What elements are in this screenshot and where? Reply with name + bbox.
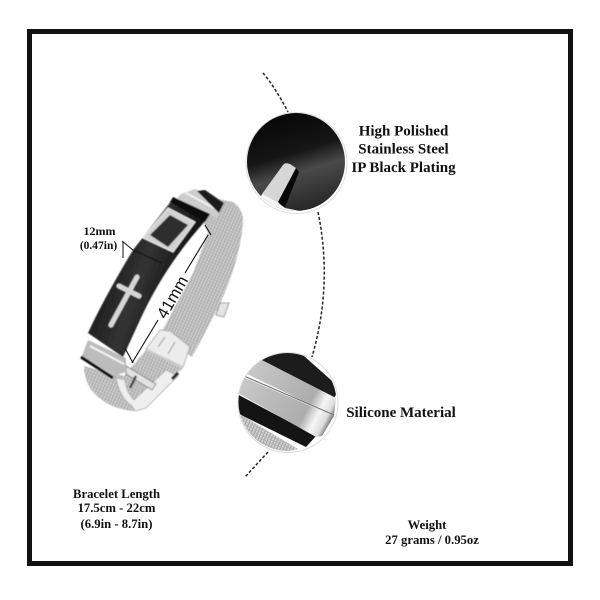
clasp tab — [216, 303, 229, 317]
text: polished steel: High Polished — [359, 124, 449, 140]
text: weight — [385, 518, 479, 547]
bottom steel cap — [82, 340, 126, 376]
text: polished steel: Stainless Steel — [358, 142, 449, 158]
top black band — [170, 197, 210, 222]
frame border — [30, 32, 570, 564]
leather inset — [150, 215, 188, 247]
label: 12mm: 12mm — [84, 224, 116, 238]
length dimension line — [125, 225, 211, 363]
buckle dark edge — [172, 373, 178, 379]
width dimension line — [122, 241, 133, 258]
text: bracelet length: 17.5cm - 22cm — [78, 501, 156, 515]
top steel cap — [176, 189, 224, 218]
detail circle: silicone — [238, 352, 338, 453]
buckle pin — [126, 366, 156, 390]
cross icon — [111, 277, 139, 325]
text: bracelet length: Bracelet Length — [73, 487, 160, 501]
text: bracelet length: (6.9in - 8.7in) — [81, 517, 152, 531]
label: 12mm: (0.47in) — [80, 240, 117, 252]
text: polished steel — [351, 124, 456, 176]
bracelet photo — [81, 189, 243, 411]
text: silicone: Silicone Material — [346, 405, 456, 421]
text: weight: 27 grams / 0.95oz — [385, 533, 479, 547]
plate frame — [143, 208, 195, 252]
mesh strap — [160, 193, 243, 357]
black plate — [88, 200, 207, 357]
lower mesh strap — [84, 350, 183, 411]
inner clasp loop — [116, 370, 178, 411]
dashed connector arc — [245, 73, 324, 477]
label: 12mm — [80, 224, 117, 252]
text: bracelet length — [73, 487, 160, 531]
plate seam — [133, 250, 162, 263]
clasp plates — [146, 330, 190, 367]
top right black band — [197, 190, 224, 213]
text: polished steel: IP Black Plating — [351, 160, 456, 176]
text: weight: Weight — [408, 518, 447, 532]
label: 41mm: 41mm — [154, 273, 192, 322]
detail circle: polished steel — [246, 112, 347, 216]
